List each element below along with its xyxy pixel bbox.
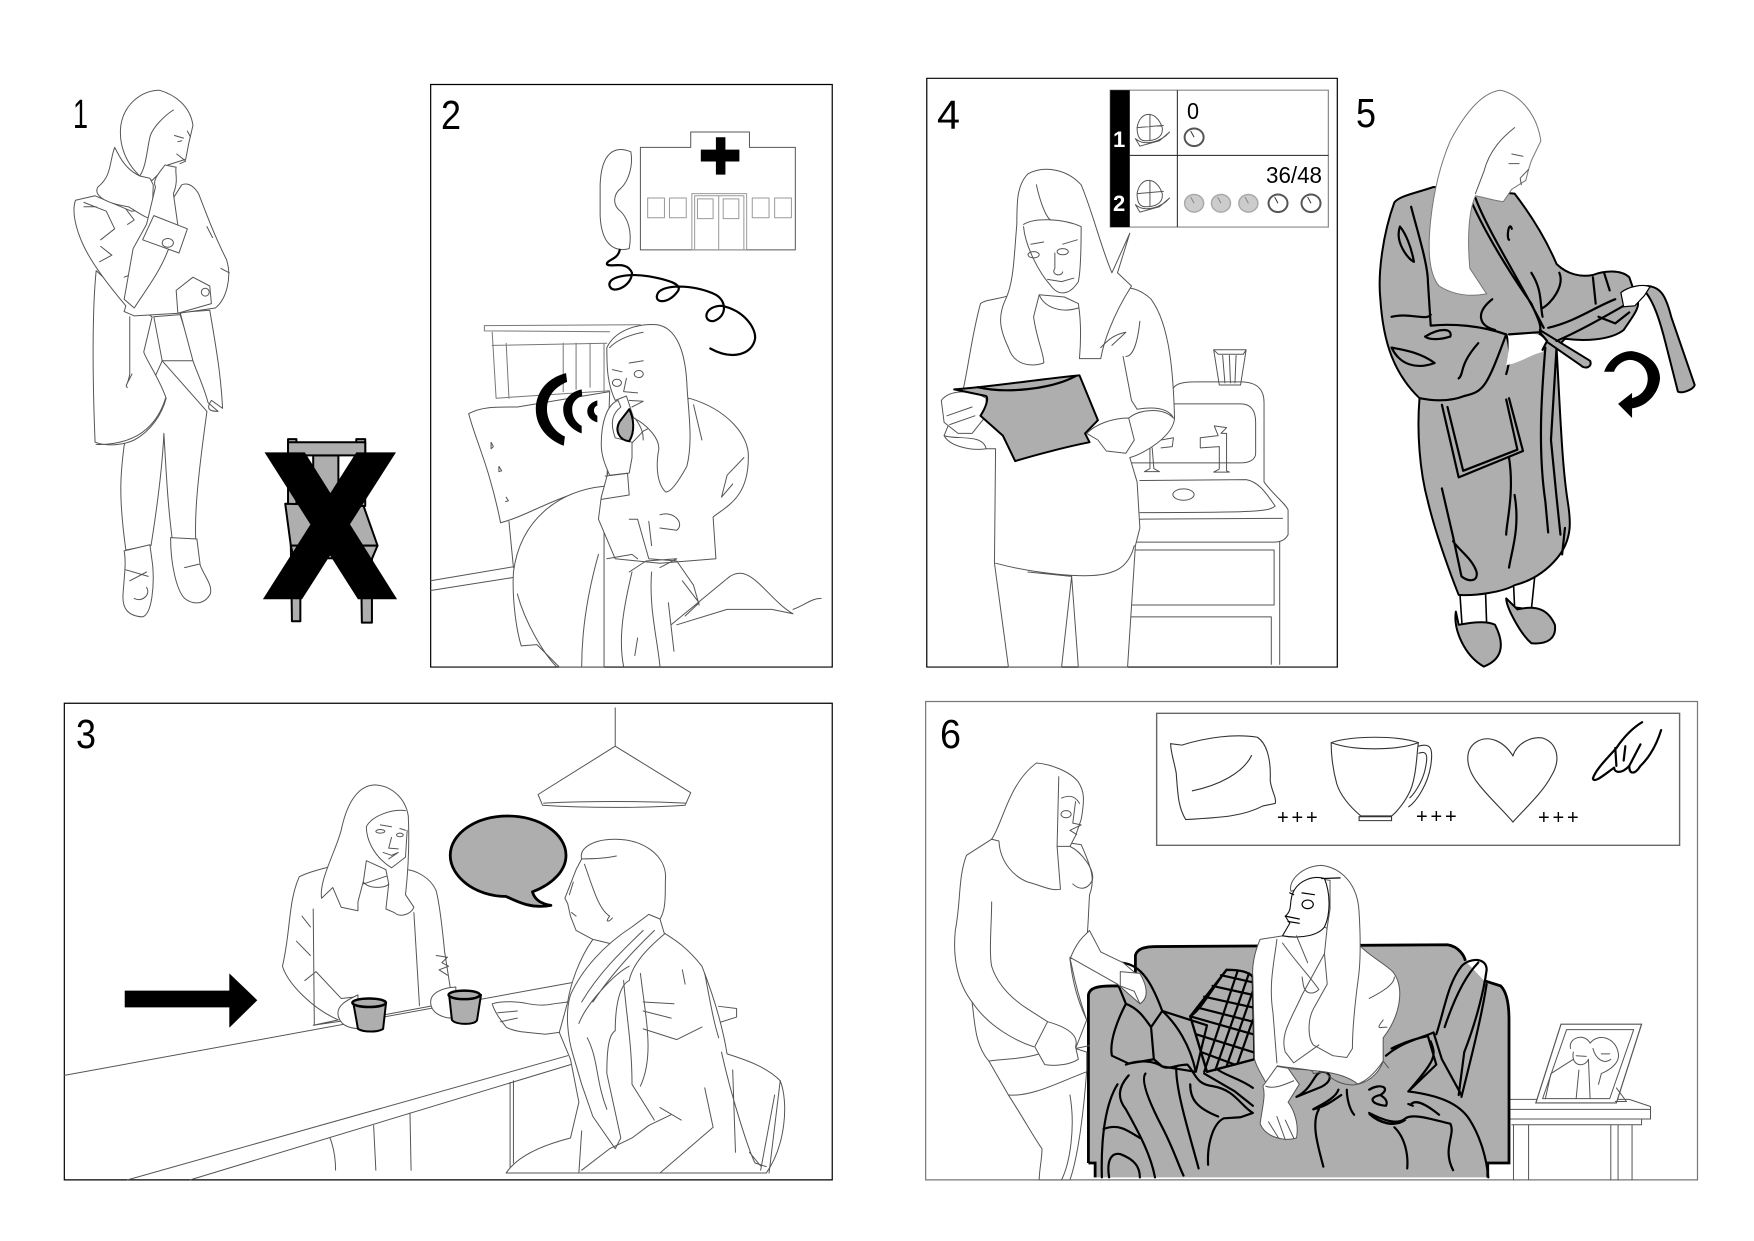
woman thinking in coat xyxy=(74,90,229,617)
panel 6: caring for woman on sofa xyxy=(926,701,1697,1180)
sink and cabinet xyxy=(1126,350,1288,664)
speech bubble xyxy=(450,816,566,906)
panel frame xyxy=(431,84,832,667)
panel 2: calling hospital from bed xyxy=(431,84,832,667)
step number 2: 2 xyxy=(441,92,461,138)
grey sofa and blanket xyxy=(1088,945,1509,1177)
panel 1: woman standing, no chair xyxy=(73,90,397,623)
icon: telephone handset xyxy=(600,150,632,250)
grey bathrobe xyxy=(1380,187,1638,595)
slippers and legs xyxy=(1455,576,1555,667)
pendant lamp xyxy=(538,708,691,807)
arrow: turning direction xyxy=(1604,351,1660,418)
telephone cord xyxy=(607,250,755,355)
picture frame on side table xyxy=(1509,1024,1651,1180)
panel frame xyxy=(926,701,1697,1180)
step number 6: 6 xyxy=(940,711,961,757)
icon: crossed-out chair xyxy=(263,439,397,623)
scoreboard table with clocks xyxy=(1110,90,1328,227)
icon: pillow xyxy=(1171,736,1276,820)
arrow: pointing right xyxy=(125,973,257,1028)
step number 4: 4 xyxy=(937,92,960,138)
step number 5: 5 xyxy=(1356,90,1376,136)
plus signs under pillow: +++ xyxy=(1277,807,1320,829)
icon: pointing hand xyxy=(1593,722,1661,780)
panel 4: reading the instructions at sink xyxy=(927,78,1337,667)
panel frame xyxy=(64,703,832,1180)
table row label 2: 2 xyxy=(1113,191,1125,216)
step number 1: 1 xyxy=(73,91,88,137)
standing woman xyxy=(282,785,456,1170)
icon: sound waves xyxy=(536,373,597,446)
woman's head and hair xyxy=(1429,90,1541,295)
panel frame xyxy=(927,78,1337,667)
icon: cup xyxy=(1331,737,1432,821)
robe belt xyxy=(1506,286,1695,392)
panel 3: talking at kitchen table xyxy=(64,703,832,1180)
bed and pillow xyxy=(431,325,640,667)
inset comfort list xyxy=(1157,713,1680,845)
table xyxy=(64,982,737,1180)
table value 0: 0 xyxy=(1187,98,1199,124)
woman on the phone xyxy=(598,325,821,667)
seated woman xyxy=(1253,865,1400,1140)
seated woman with scarf xyxy=(492,839,785,1173)
icon: heart xyxy=(1468,738,1557,822)
woman reading letter xyxy=(941,169,1175,667)
panel 5: woman tying bathrobe belt xyxy=(1356,90,1695,667)
icon: hospital xyxy=(640,132,795,250)
table value 36/48: 36/48 xyxy=(1266,162,1322,188)
mugs xyxy=(352,991,481,1032)
standing woman at sofa xyxy=(955,763,1146,1180)
plus signs under heart: +++ xyxy=(1538,807,1581,829)
step number 3: 3 xyxy=(76,711,96,757)
plus signs under cup: +++ xyxy=(1416,806,1459,828)
table row label 1: 1 xyxy=(1113,127,1125,152)
